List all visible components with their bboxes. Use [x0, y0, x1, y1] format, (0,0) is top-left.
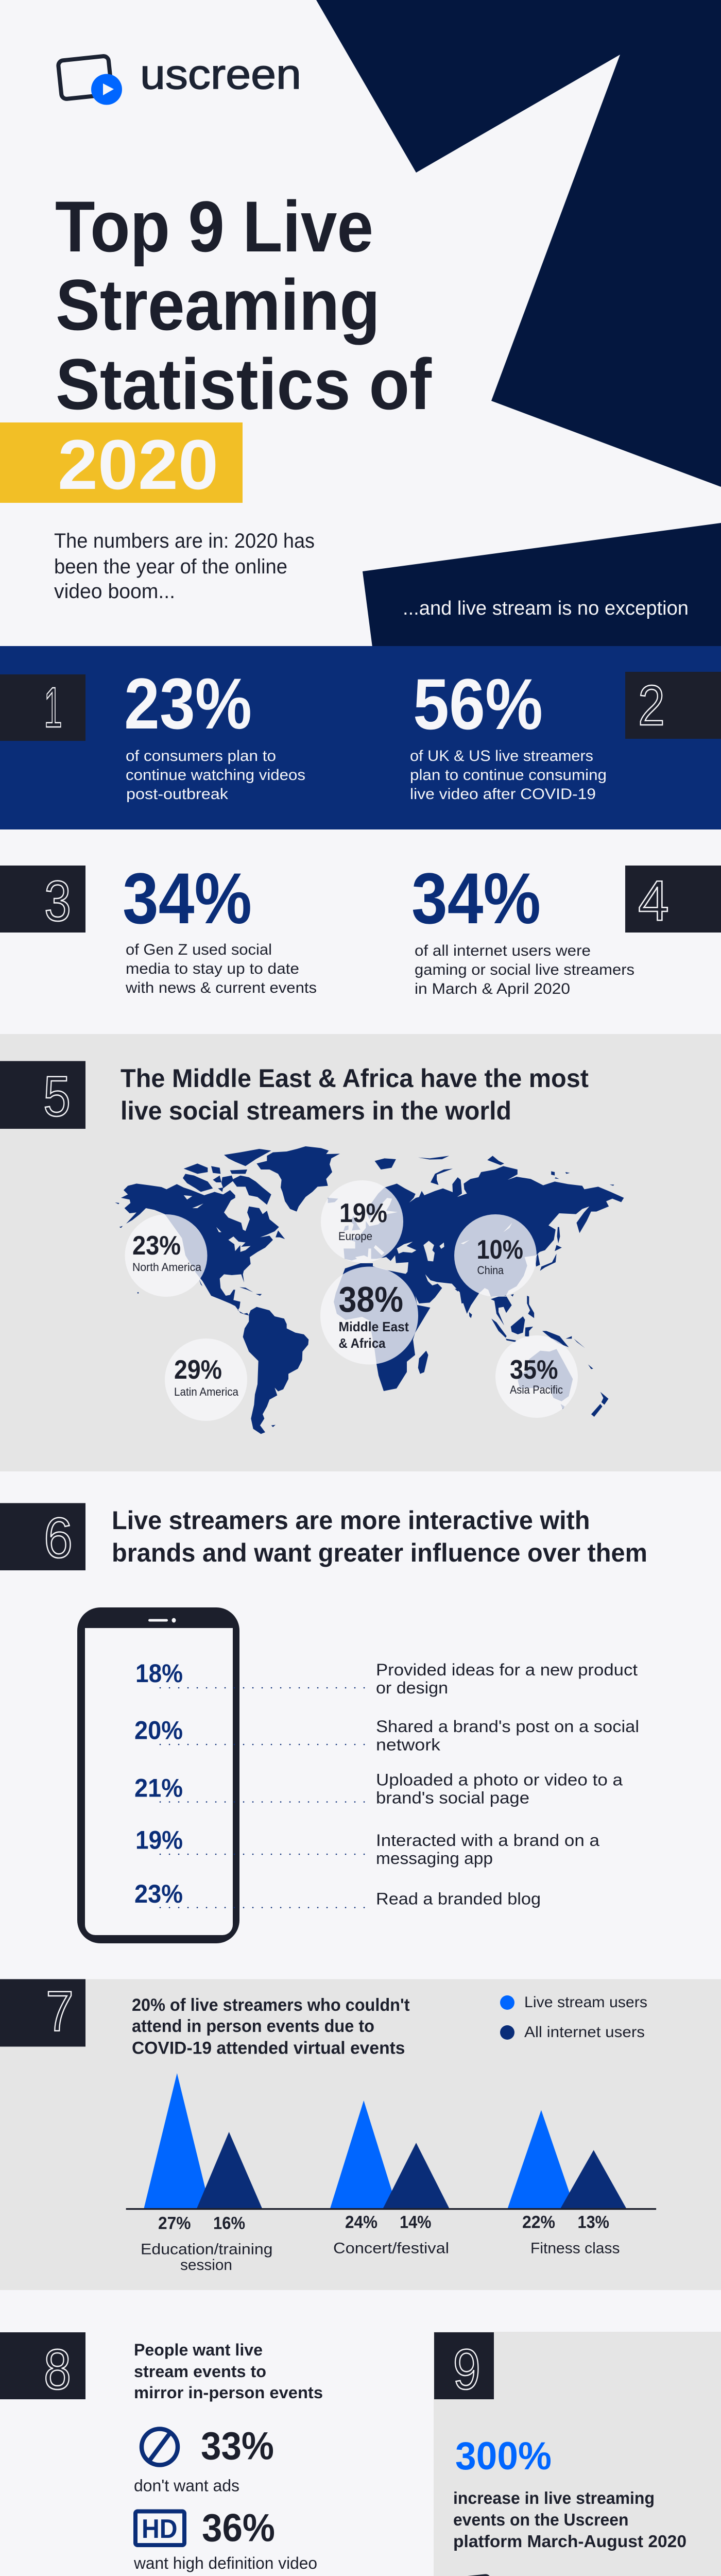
- row: 20%: Shared a brand's post on a social: [376, 1717, 639, 1736]
- stat: 300%: 300%: [455, 2434, 552, 2478]
- stat 23%: 23%: [124, 663, 252, 744]
- intro text: The numbers are in: 2020 has: [54, 530, 315, 552]
- panel: section 7 virtual events chart: [0, 1979, 721, 2290]
- row: 18%: Provided ideas for a new product: [376, 1660, 638, 1679]
- label: no ads: don't want ads: [134, 2476, 239, 2495]
- callout: North America 23%: North America: [132, 1261, 202, 1274]
- callout: Latin America 29%: 29%: [174, 1355, 222, 1385]
- chart categories: Education/training: [141, 2241, 273, 2258]
- callout: Europe 19%: 19%: [339, 1198, 387, 1228]
- intro text: [54, 530, 315, 603]
- row: 20%: 20%: [134, 1716, 183, 1744]
- callout: North America 23%: [125, 1214, 207, 1297]
- year highlight: [0, 422, 243, 504]
- stat 1 description: [126, 748, 305, 803]
- section 8 heading: stream events to: [134, 2362, 266, 2381]
- stat 4 description: gaming or social live streamers: [415, 961, 634, 978]
- stat 4 description: in March & April 2020: [415, 980, 570, 997]
- stat 2 description: live video after COVID-19: [410, 786, 596, 803]
- panel: section 9 uscreen growth: [434, 2332, 721, 2576]
- row: 19%: messaging app: [376, 1849, 493, 1868]
- row: 23%: 23%: [134, 1879, 183, 1908]
- intro text: video boom...: [54, 580, 175, 603]
- callout: Asia Pacific 35%: 35%: [510, 1355, 558, 1385]
- badge 5: [0, 1061, 85, 1129]
- row: 23%: Read a branded blog: [376, 1890, 541, 1908]
- year highlight: 2020: [58, 426, 218, 504]
- stat 34% right: 34%: [411, 858, 541, 939]
- badge 9: [434, 2332, 494, 2401]
- badge 7: 7: [46, 1980, 74, 2043]
- badge 5: 5: [43, 1065, 71, 1128]
- badge 3: [0, 866, 85, 933]
- stat 56%: 56%: [413, 664, 543, 744]
- legend: [500, 1994, 647, 2041]
- row: 20%: [134, 1716, 639, 1754]
- stat: 33%: 33%: [201, 2425, 274, 2468]
- title: [55, 186, 432, 425]
- row: 21%: [134, 1770, 623, 1807]
- star background shape: [316, 0, 721, 487]
- row: 19%: [135, 1826, 599, 1868]
- callout: Middle East and Africa 38%: 38%: [339, 1279, 403, 1319]
- chart categories: session: [180, 2257, 232, 2274]
- stat 3 description: of Gen Z used social: [126, 941, 272, 958]
- callout: Latin America 29%: Latin America: [174, 1385, 239, 1398]
- hero panel: [0, 0, 721, 647]
- section 5 heading: The Middle East & Africa have the most: [121, 1064, 589, 1093]
- panel: section 6 brands: [0, 1503, 647, 1943]
- badge 2: [625, 672, 721, 739]
- label: high definition: want high definition video: [133, 2554, 317, 2572]
- section 6 heading: brands and want greater influence over them: [112, 1538, 647, 1567]
- callout: Latin America 29%: [165, 1338, 247, 1421]
- triangle chart: [126, 2073, 656, 2210]
- callout: Europe 19%: Europe: [338, 1230, 372, 1243]
- title: Statistics of: [56, 344, 432, 425]
- logo: uscreen: [58, 51, 301, 105]
- section 7 heading: [132, 1995, 410, 2058]
- section 8 heading: People want live: [134, 2341, 263, 2359]
- callout: Asia Pacific 35%: [495, 1335, 578, 1418]
- section 5 heading: [121, 1064, 589, 1125]
- dotted leader lines: [160, 1688, 366, 1907]
- badge 8: 8: [44, 2338, 71, 2401]
- section 8 heading: mirror in-person events: [134, 2383, 323, 2402]
- section 6 heading: [112, 1506, 647, 1567]
- callout: China 10%: 10%: [477, 1235, 523, 1265]
- hero closing text: ...and live stream is no exception: [403, 598, 689, 619]
- chart values: 16%: [213, 2213, 245, 2233]
- badge 6: 6: [44, 1506, 73, 1570]
- badge 1: [0, 674, 85, 741]
- chart categories: Concert/festival: [333, 2240, 449, 2257]
- stat 3 description: with news & current events: [125, 979, 317, 996]
- stat 2 description: of UK & US live streamers: [410, 748, 593, 765]
- section 9 description: platform March-August 2020: [453, 2532, 686, 2551]
- stat 1 description: of consumers plan to: [126, 748, 276, 765]
- callout: Middle East and Africa 38%: [320, 1266, 418, 1364]
- stat 2 description: [410, 748, 607, 803]
- badge 2: 2: [638, 674, 665, 737]
- row: 20%: network: [376, 1735, 441, 1754]
- row: 21%: 21%: [134, 1773, 183, 1802]
- panel: stats 1 and 2: [0, 646, 721, 829]
- callout: Middle East and Africa 38%: & Africa: [339, 1335, 386, 1351]
- section 9 description: [453, 2488, 686, 2551]
- badge 1: 1: [44, 676, 62, 739]
- icon: HD: HD: [142, 2514, 177, 2544]
- row: 19%: Interacted with a brand on a: [376, 1831, 599, 1850]
- world map: [115, 1146, 624, 1434]
- stat 3 description: [125, 941, 317, 996]
- row: 21%: brand's social page: [376, 1789, 529, 1807]
- badge 4: 4: [638, 869, 669, 933]
- stat 4 description: of all internet users were: [415, 942, 591, 959]
- section 6 heading: Live streamers are more interactive with: [112, 1506, 590, 1535]
- row: 21%: Uploaded a photo or video to a: [376, 1770, 623, 1789]
- section 5 heading: live social streamers in the world: [121, 1096, 511, 1125]
- legend: Live stream users: [524, 1994, 647, 2011]
- row: 18%: [135, 1659, 638, 1697]
- badge 4: [625, 866, 721, 933]
- row: 19%: 19%: [135, 1826, 183, 1855]
- panel: stats 3 and 4: [0, 858, 721, 997]
- title: Streaming: [56, 264, 380, 345]
- callout: Europe 19%: [321, 1180, 403, 1263]
- callout: Middle East and Africa 38%: Middle East: [339, 1319, 409, 1334]
- row: 23%: [134, 1879, 541, 1908]
- chart values: 13%: [578, 2212, 609, 2232]
- panel: section 8 in-person events: [0, 2332, 323, 2576]
- chart values: 22%: [522, 2212, 555, 2232]
- stat 2 description: plan to continue consuming: [410, 767, 607, 784]
- chart values: [158, 2212, 609, 2233]
- intro text: been the year of the online: [54, 555, 287, 578]
- chart values: 27%: [158, 2213, 191, 2233]
- section 7 heading: 20% of live streamers who couldn't: [132, 1995, 410, 2015]
- row: 18%: or design: [376, 1679, 448, 1697]
- badge 9: 9: [453, 2338, 480, 2401]
- panel: world map section 5: [0, 1034, 721, 1471]
- chart categories: [141, 2240, 620, 2274]
- section 7 heading: attend in person events due to: [132, 2016, 374, 2036]
- section 7 heading: COVID-19 attended virtual events: [132, 2038, 405, 2058]
- legend: All internet users: [524, 2024, 645, 2041]
- chart categories: Fitness class: [530, 2240, 620, 2257]
- icon: no ads: [142, 2429, 178, 2465]
- badge 3: 3: [44, 870, 71, 933]
- stat 1 description: continue watching videos: [126, 767, 305, 784]
- icon: uscreen mark: [456, 2575, 502, 2576]
- icon: phone: [77, 1607, 239, 1943]
- callout: Asia Pacific 35%: Asia Pacific: [510, 1383, 563, 1396]
- callout: China 10%: [454, 1214, 537, 1297]
- row: 18%: 18%: [135, 1659, 183, 1688]
- stat: 36%: 36%: [202, 2506, 275, 2550]
- callout: North America 23%: 23%: [132, 1231, 181, 1261]
- stat 34% left: 34%: [123, 858, 252, 939]
- lower navy shape: [363, 523, 721, 647]
- badge 6: [0, 1503, 85, 1570]
- stat 1 description: post-outbreak: [126, 786, 229, 803]
- stat 4 description: [415, 942, 634, 997]
- chart values: 14%: [400, 2212, 432, 2232]
- logo: uscreen: uscreen: [140, 51, 301, 98]
- title: Top 9 Live: [55, 186, 373, 267]
- badge 8: [0, 2332, 85, 2401]
- section 9 description: events on the Uscreen: [453, 2510, 628, 2529]
- stat 3 description: media to stay up to date: [126, 960, 299, 977]
- badge 7: [0, 1979, 85, 2046]
- callout: China 10%: China: [477, 1264, 504, 1277]
- chart values: 24%: [345, 2212, 377, 2232]
- section 8 heading: [134, 2341, 323, 2402]
- section 9 description: increase in live streaming: [453, 2488, 655, 2507]
